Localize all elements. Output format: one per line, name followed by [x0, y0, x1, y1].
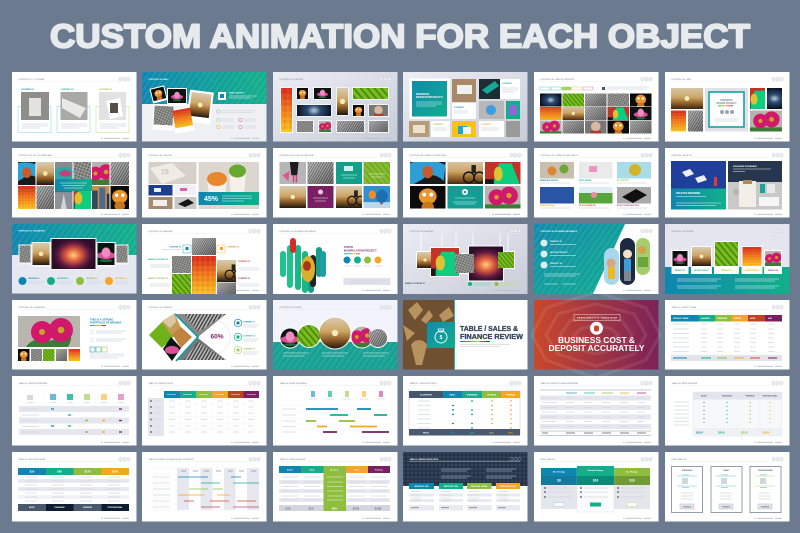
slide: products with capsule photos: PRODUCT 01	[550, 241, 562, 243]
slide: three columns content: CONTENT 02	[60, 89, 74, 91]
slide: three column photo blocks	[403, 148, 528, 218]
slide: table sales and finance review section cover: $	[440, 335, 443, 341]
slide: products with capsule photos	[534, 224, 658, 294]
slide: Romania design projects: CONTENT	[481, 124, 491, 126]
slide: gallery with feature icons on teal	[12, 224, 136, 294]
slide: branding design project: BRANDING	[720, 99, 733, 102]
slide: four plan price table: $325	[741, 430, 748, 434]
slide: mosaic with content labels	[142, 224, 266, 295]
slide: strong portfolio of brands	[12, 300, 136, 370]
slide: mosaic with content labels: CONTENT 06	[238, 278, 250, 280]
slide: Romania design projects: CONTENT	[502, 83, 512, 85]
slide: business cost and deposit accurately: BUSINESS COST &	[558, 335, 635, 345]
slide: gallery with feature icons on teal: FEATURE 04	[115, 277, 127, 280]
slide: Romania design projects: CONTENT	[433, 124, 443, 126]
slide: three price cards: $16	[629, 478, 635, 482]
slide: products with capsule photos: PRODUCT 03	[550, 263, 562, 265]
slide: branding design project: PORTFOLIO 42: GRID	[672, 78, 692, 81]
slide: Romania design projects: CONTENT	[454, 107, 464, 109]
slide: four column blocks: PORTFOLIO 46: FOUR COLUMN GRID	[280, 154, 314, 157]
slide: three outlined price cards: PURCHASE	[761, 505, 769, 508]
slide: framed photos on teal band: SECOND PRODUCT	[694, 270, 709, 272]
slide: product sales statement table	[534, 376, 658, 446]
slide: plan comparison table: BASIC	[450, 393, 456, 396]
slide: five plan table highlighted: $299	[375, 506, 382, 510]
slide: Gantt timeline chart: TABLE 04: WORK PROGRESS	[280, 382, 307, 385]
slide: Romania design projects: ROMANIA	[416, 92, 429, 96]
slide: five column photo grid: PORTFOLIO 41: GRID BY CATEGORY	[540, 78, 575, 81]
slide: products with capsule photos: SECOND PRODUCT	[550, 252, 569, 254]
slide: five plan table highlighted: $250	[353, 506, 360, 510]
slide: five plan table highlighted: $20	[308, 506, 314, 510]
slide: strong portfolio of brands: PORTFOLIO 54: SLIDESHOW	[18, 306, 45, 309]
slide: diamond mosaic with 60 percent: CONTENT 02	[243, 336, 255, 338]
slide: hanging photos: PORTFOLIO 58: HANGING	[410, 230, 434, 233]
slide: three columns content: PORTFOLIO 37: 3 COLUMNS	[18, 79, 45, 81]
slide: product sales statement table: TABLE 08: PRODUCT SALES STATEMENT	[540, 382, 579, 385]
slide: polaroid photos on teal	[142, 72, 266, 142]
slide: diamond mosaic with 60 percent: 60%	[210, 334, 224, 340]
slide: hanging photos: SAMPLE CONTENT 01	[405, 282, 425, 285]
slide: framed photos on teal band	[665, 224, 790, 294]
slide: four plan price table: TABLE 09: PRICE PACKAGE	[672, 382, 698, 385]
slide: photo manipulation project: MANIPULATION PROJECT	[344, 248, 377, 252]
slide: three column photo blocks: PORTFOLIO 46: THREE COLUMNS GRID	[410, 154, 447, 157]
slide: three price cards: $24	[593, 478, 598, 482]
slide: circles on teal wave	[273, 300, 398, 370]
slide: mosaic with content labels: SAMPLE CONTENT 02	[148, 258, 168, 261]
slide: four plan price table	[665, 376, 790, 446]
slide: services on dark header	[403, 452, 528, 522]
slide: five plan table highlighted: $50	[332, 506, 337, 510]
slide: three column product showcase: 3D ILLUSTRATION	[579, 204, 596, 207]
slide: business cost and deposit accurately	[532, 292, 660, 378]
slide: three columns content: CONTENT 01	[21, 89, 35, 91]
slide: photo gallery wall	[257, 72, 398, 142]
slide: three price cards: Eco Package	[626, 472, 638, 474]
slide: diamond mosaic with 60 percent: CONTENT 01	[243, 322, 255, 324]
slide: diamond mosaic with 60 percent: CONTENT 03	[243, 348, 255, 350]
slide: product sales table: MAY	[768, 317, 773, 320]
slide: compare table six colours	[142, 376, 266, 446]
slide: plan comparison table: $100	[450, 432, 456, 434]
slide: table sales and finance review section cover	[403, 300, 528, 370]
slide: Romania design projects	[403, 72, 528, 142]
slide: four plan price table: STANDARD	[722, 394, 733, 398]
slide: plan comparison table: PLAN/WORK	[420, 393, 432, 396]
slide: creative branding blog: MOUNTAIN STATEMENT	[733, 165, 758, 168]
slide: product sales table: PRODUCT NAME	[673, 317, 689, 320]
slide: product sales table: APRIL	[750, 317, 757, 320]
slide: weekly schedule chart	[142, 452, 266, 522]
slide: three column product showcase	[534, 148, 658, 218]
slide: photo manipulation project	[273, 224, 398, 294]
slide: three outlined price cards	[665, 452, 790, 522]
slide: five plan table highlighted: Starter	[287, 468, 293, 472]
slide: five column photo grid	[534, 72, 658, 142]
slide: four plan table: $140	[84, 470, 91, 474]
slide: three outlined price cards: PURCHASE	[722, 505, 730, 508]
slide: plan comparison table: OPTIMUM	[487, 394, 496, 396]
45 percent banner: 45%	[204, 196, 219, 203]
slide: three price cards: $9	[557, 478, 561, 482]
slide: compare table six colours: TABLE 03: SERVICE PRICE	[148, 382, 174, 385]
slide: diamond mosaic with 60 percent: PORTFOLIO 55: DIAMOND	[148, 306, 173, 309]
slide: four plan table: STANDARD	[54, 506, 65, 509]
slide: strong portfolio of brands: THIS IS A STRONG	[90, 318, 113, 322]
slide: four plan table: PROFESSIONAL	[108, 506, 123, 509]
slide: branding design project: DESIGN PROJECT	[716, 103, 737, 105]
slide: four plan table	[12, 452, 136, 522]
slide: four plan price table: PREMIUM	[746, 396, 755, 398]
slide: mosaic with content labels: CONTENT 04	[227, 246, 240, 248]
slide: polaroid photos on teal: PORTFOLIO 38: WALL	[148, 78, 170, 81]
slide: services on dark header: SERVICES THREE	[471, 486, 488, 488]
slide: plan comparison table: PRICE	[423, 432, 430, 434]
slide: services on dark header: SERVICES FOUR	[500, 486, 516, 488]
slide: five plan table highlighted	[273, 452, 398, 522]
slide: three column product showcase: PRINT MEDIA	[579, 179, 592, 182]
slide: six column photo grid	[11, 148, 137, 218]
slide: diamond mosaic with 60 percent	[142, 300, 266, 370]
slide: four plan table: $80	[57, 470, 62, 474]
slide: branding mock-ups with 45 percent: PORTFOLIO 45: GALLERY	[148, 154, 173, 157]
slide: mosaic with content labels: CONTENT 01	[169, 246, 181, 248]
slide: five plan table highlighted: Basic	[309, 470, 315, 472]
slide: product sales table: TABLE 01: PRODUCT SALE	[672, 306, 697, 309]
slide: four plan table: TABLE 05: PRICE PACKAGES	[18, 458, 46, 461]
slide: services on dark header: TABLE 2: SERVICE WITH PRICE	[410, 458, 439, 461]
slide: plan comparison table: $250	[508, 432, 514, 434]
slide: gallery with feature icons on teal: FEATURE 03	[86, 277, 97, 280]
slide: creative branding blog: PORTFOLIO 48: BLOG	[672, 154, 692, 157]
slide: mosaic with content labels: SAMPLE CONTENT 03	[148, 277, 168, 280]
slide: hanging photos	[403, 224, 528, 294]
slide: five plan table highlighted: Premium	[375, 470, 383, 472]
slide: photo manipulation project: PORTFOLIO 53: ROUNDED RECTANGLE	[280, 230, 317, 233]
slide: five plan table highlighted: $45	[285, 506, 291, 510]
slide: four plan price table: PROFESSIONAL	[763, 394, 778, 398]
slide: services on dark header: SERVICES ONE	[414, 486, 429, 488]
slide: weekly schedule chart: TABLE 06: WEEKLY SCHEDULE WITH CATEGORY	[148, 458, 194, 461]
slide: four column blocks	[273, 148, 398, 218]
slide: four plan price table: $500	[763, 430, 770, 434]
slide: three outlined price cards: STANDARD	[682, 469, 693, 472]
slide: three price cards	[534, 452, 658, 522]
slide: three column product showcase: BRANDING DESIGN	[540, 179, 559, 182]
slide: four plan price table: $200	[718, 430, 725, 434]
slide: gallery with feature icons on teal: FEATURE 01	[28, 277, 39, 280]
slide: service feature table	[12, 376, 136, 446]
slide: service feature table: TABLE 02: SERVICE FEATURES	[18, 382, 48, 385]
slide: gallery with feature icons on teal: FEATURE 02	[57, 277, 68, 280]
slide: product sales table: MARCH	[734, 317, 742, 320]
slide: framed photos on teal band: PRODUCT 03	[721, 270, 732, 272]
slide: three column product showcase: BOOK COVER MOCK UP	[617, 205, 640, 207]
title: CUSTOM ANIMATION FOR EACH OBJECT	[50, 18, 750, 54]
slide: branding mock-ups with 45 percent	[142, 148, 266, 218]
slide: plan comparison table	[403, 376, 528, 446]
slide: polaroid photos on teal: SAVE CONCEPT	[229, 92, 245, 94]
slide: product sales table	[665, 300, 790, 370]
slide: three outlined price cards: BASIC	[724, 469, 730, 472]
slide: four plan table: PREMIUM	[83, 507, 92, 509]
slide: three columns content	[12, 72, 136, 142]
slide: services on dark header: SERVICES TWO	[444, 486, 459, 488]
slide: four plan table: BASIC	[29, 506, 36, 509]
slide: three column product showcase: PORTFOLIO 47: THREE COLUMN GRID 02	[540, 154, 578, 157]
slide: product sales table: FEBRUARY	[717, 317, 728, 320]
slide: circles on teal wave: PORTFOLIO 57: ROUND	[280, 307, 302, 309]
slide: framed photos on teal band: PORTFOLIO 65: ROUND	[672, 231, 694, 233]
slide: framed photos on teal band: PRODUCT 05	[768, 270, 778, 272]
slide: plan comparison table: TABLE 07: CHECKLIST PRICE	[410, 382, 437, 385]
slide: mosaic with content labels: PORTFOLIO 52: MASONRY	[148, 230, 174, 233]
slide: four plan price table: $100	[696, 430, 703, 434]
slide: three price cards: Ultimate Package	[588, 469, 603, 472]
slide: framed photos on teal band: PRODUCT 01	[675, 270, 685, 272]
slide: product sales table: JANUARY	[701, 317, 711, 320]
slide: five plan table highlighted: Plus	[355, 470, 359, 472]
slide: three column product showcase: 3D CONCEPT	[617, 180, 630, 182]
slide: products with capsule photos: PORTFOLIO 62: ROUNDED RECTANGLE	[540, 230, 578, 233]
slide: plan comparison table: $200	[489, 432, 495, 434]
slide: three columns content: CONTENT 03	[99, 89, 113, 91]
slide: four plan table: $240	[112, 470, 119, 474]
slide: creative branding blog	[665, 148, 790, 218]
slide: Gantt timeline chart	[273, 376, 398, 446]
slide: table sales and finance review section cover: TABLE / SALES &	[460, 324, 519, 333]
slide: strong portfolio of brands: PORTFOLIO OF BRANDS	[90, 320, 122, 324]
slide: three column product showcase: BRANDING BAG	[540, 204, 555, 207]
slide: three price cards: PRICE TABLE 01	[540, 458, 556, 461]
slide: four plan price table: BASIC	[701, 394, 708, 398]
flower photo	[18, 316, 80, 347]
slide: business cost and deposit accurately: DEPOSIT ACCURATELY	[548, 343, 645, 353]
slide: three outlined price cards: PURCHASE	[683, 505, 691, 508]
slide: Romania design projects: DESIGN PROJECTS	[416, 95, 443, 99]
slide: photo gallery wall: PORTFOLIO 39: GALLERY	[280, 78, 304, 81]
slide: five plan table highlighted: Business	[330, 470, 339, 472]
slide: mosaic with content labels: CONTENT 05	[238, 261, 250, 263]
slide: business cost and deposit accurately: TRAIN ANALYTIC TABLE STEP	[577, 316, 618, 320]
slide: three price cards: Best Package	[553, 470, 565, 474]
slide: six column photo grid: PORTFOLIO 43: SIX COLUMNS GRID	[18, 154, 52, 157]
slide: five plan table highlighted: TABLE 06: PRICE PACKAGE	[280, 458, 306, 461]
slide: framed photos on teal band: FOURTH PRODUCT	[745, 270, 760, 272]
slide: three outlined price cards: PROFESSIONAL	[758, 469, 774, 472]
slide: plan comparison table: PREMIUM	[506, 394, 515, 396]
slide: photo manipulation project: PHOTO	[344, 245, 353, 249]
slide: branding design project	[664, 72, 790, 142]
slide: gallery with feature icons on teal: PORTFOLIO 51: SLIDESHOW	[18, 230, 45, 232]
slide: creative branding blog: CREATIVE BRANDING	[676, 192, 701, 195]
slide: table sales and finance review section cover: FINANCE REVIEW	[460, 332, 523, 341]
slide: plan comparison table: $160	[470, 432, 475, 434]
slide: plan comparison table: STANDARD	[467, 393, 478, 396]
slide: branding mock-ups with 45 percent: 15	[161, 169, 169, 176]
slide: four plan table: $20	[30, 470, 35, 474]
slide: three outlined price cards: PRICE TABLE 02	[672, 458, 687, 461]
